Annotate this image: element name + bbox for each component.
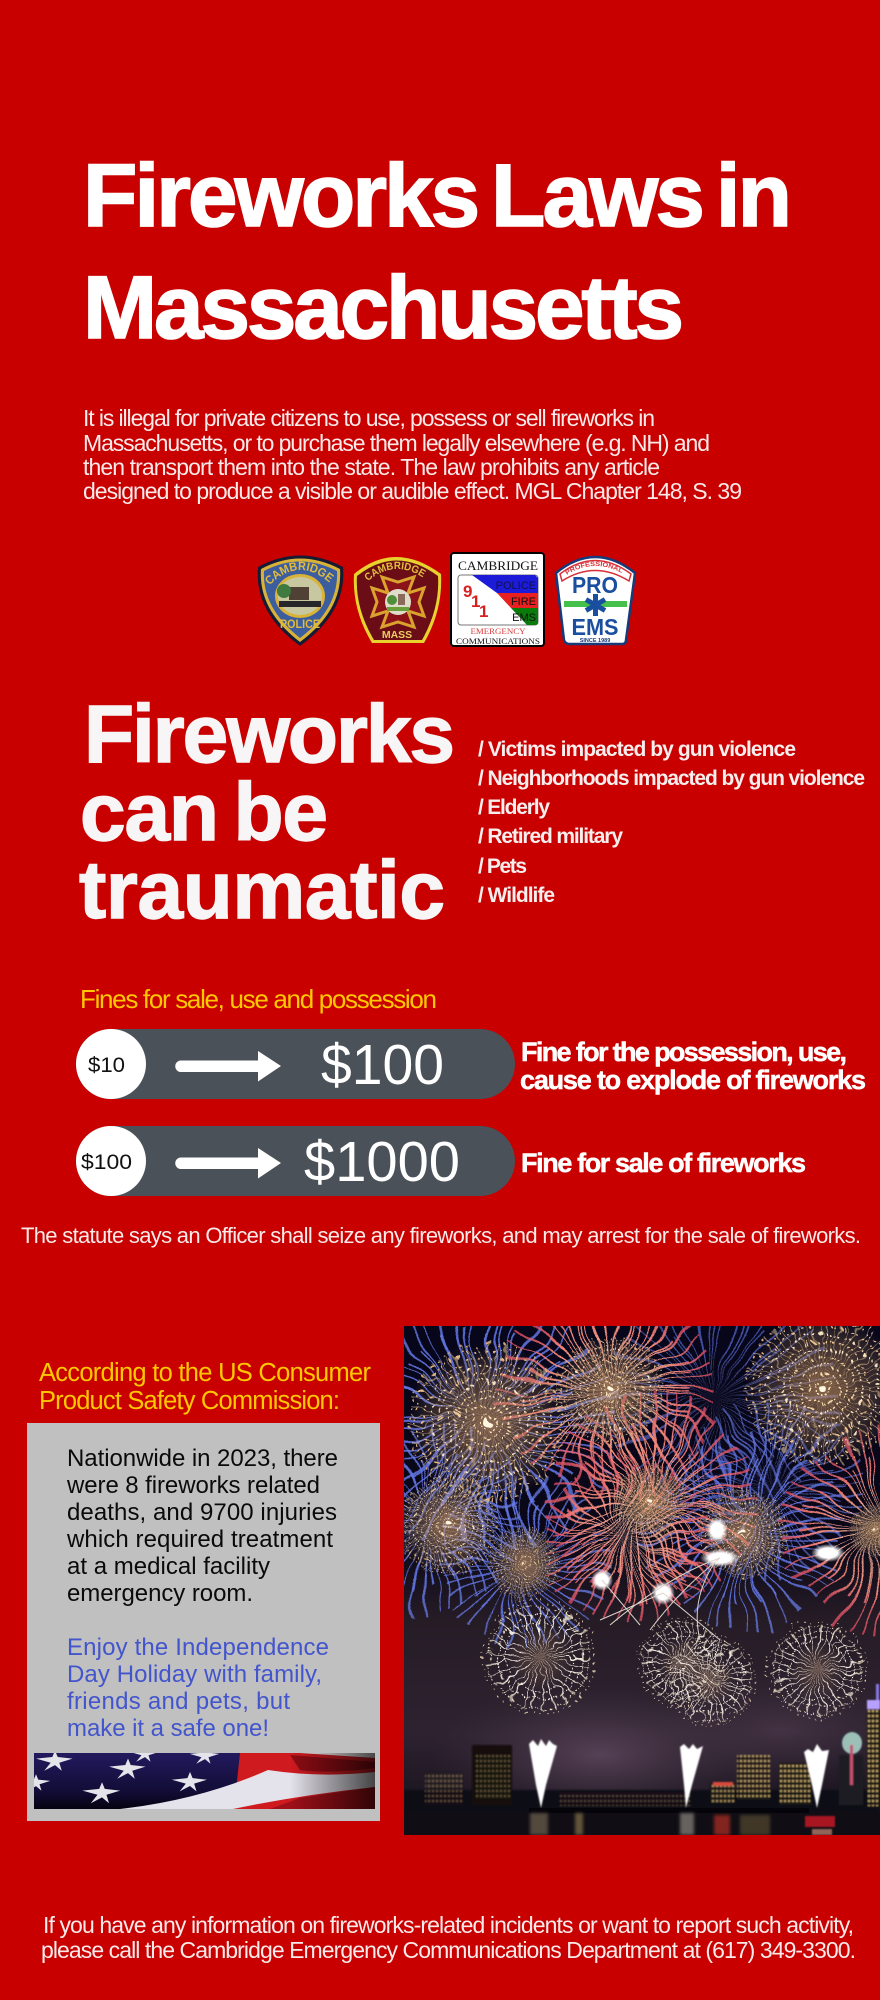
icon: Cambridge fire badge: MASS <box>382 629 412 641</box>
statistics text: at a medical facility <box>67 1553 270 1580</box>
icon: Cambridge 911 emergency communications logo: 1 <box>479 602 488 621</box>
fountains <box>529 1739 829 1808</box>
icon: Cambridge fire badge: CAMBRIDGE <box>364 562 426 580</box>
list: who is affected: / Wildlife <box>478 884 555 907</box>
logos row <box>258 552 636 647</box>
icon: Cambridge 911 emergency communications logo: EMS <box>512 612 536 624</box>
fine description: possession: cause to explode of fireworks <box>520 1065 866 1095</box>
footer contact note: please call the Cambridge Emergency Communications Department at (617) 349-3300. <box>41 1937 856 1963</box>
holiday message: make it a safe one! <box>67 1715 269 1742</box>
gold bursts <box>404 1326 880 1602</box>
fine pill: possession: $100 <box>321 1033 444 1097</box>
holiday message <box>67 1634 329 1742</box>
icon: Pro EMS badge: EMS <box>572 614 618 640</box>
holiday message: Day Holiday with family, <box>67 1661 322 1688</box>
statistics text: were 8 fireworks related <box>66 1472 320 1499</box>
holiday message: friends and pets, but <box>67 1688 290 1715</box>
heading: fireworks can be traumatic: can be <box>80 767 328 858</box>
title: Massachusetts <box>83 257 684 357</box>
icon: Cambridge 911 emergency communications logo: EMERGENCY <box>470 626 526 636</box>
icon: Cambridge 911 emergency communications logo <box>451 553 544 646</box>
statistics text: emergency room. <box>67 1580 253 1607</box>
intro paragraph: then transport them into the state. The law prohibits any article <box>83 454 660 480</box>
icon: Cambridge police badge <box>258 556 344 646</box>
icon: Cambridge 911 emergency communications logo: 1 <box>471 592 480 611</box>
icon: Cambridge fire badge <box>354 557 442 643</box>
holiday message: Enjoy the Independence <box>67 1634 329 1661</box>
icon: Pro EMS badge: SINCE 1989 <box>580 638 610 644</box>
footer contact note <box>41 1912 856 1963</box>
list: who is affected: / Elderly <box>478 796 550 819</box>
icon: Cambridge police badge: CAMBRIDGE <box>266 562 334 584</box>
image: American flag <box>34 1753 375 1809</box>
arrow <box>175 1051 281 1082</box>
icon: Cambridge 911 emergency communications logo: FIRE <box>511 596 536 608</box>
title <box>83 145 792 357</box>
CPSC heading <box>39 1359 372 1415</box>
CPSC heading: Product Safety Commission: <box>39 1387 340 1415</box>
fine pill: sale <box>76 1126 515 1196</box>
water and reflections <box>404 1808 880 1835</box>
heading: fireworks can be traumatic <box>79 689 455 936</box>
footer contact note: If you have any information on fireworks-related incidents or want to report such activity, <box>43 1912 854 1938</box>
statistics text: deaths, and 9700 injuries <box>67 1499 337 1526</box>
statute note: The statute says an Officer shall seize any fireworks, and may arrest for the sale of fireworks. <box>21 1223 861 1248</box>
heading: fireworks can be traumatic: traumatic <box>79 845 445 936</box>
arrow <box>175 1148 281 1178</box>
fine description: possession <box>520 1037 866 1095</box>
icon: Pro EMS badge: PRO <box>572 572 618 598</box>
fine pill: possession: $10 <box>88 1054 125 1077</box>
fine description: sale: Fine for sale of fireworks <box>521 1148 806 1178</box>
list: who is affected: / Pets <box>478 855 527 878</box>
fine pill: sale: $100 <box>81 1151 132 1174</box>
intro paragraph: It is illegal for private citizens to use, possess or sell fireworks in <box>83 405 655 431</box>
list: who is affected: / Retired military <box>478 825 623 848</box>
fines heading: Fines for sale, use and possession <box>80 984 437 1014</box>
image: fireworks over the city skyline <box>404 1326 880 1835</box>
white bursts <box>483 1600 869 1736</box>
icon: Cambridge police badge: POLICE <box>280 619 320 631</box>
statistics text: Nationwide in 2023, there <box>67 1445 338 1472</box>
list: who is affected <box>478 738 865 907</box>
list: who is affected: / Victims impacted by gun violence <box>478 738 796 761</box>
skyline <box>404 1684 880 1814</box>
fine description: possession: Fine for the possession, use, <box>521 1037 847 1067</box>
icon: Pro EMS badge: PROFESSIONAL <box>565 562 622 575</box>
fine pill: sale: $1000 <box>304 1130 460 1194</box>
list: who is affected: / Neighborhoods impacted by gun violence <box>478 767 865 790</box>
fine pill: possession <box>76 1029 515 1099</box>
icon: Cambridge 911 emergency communications logo: 9 <box>463 582 472 601</box>
intro paragraph: designed to produce a visible or audible effect. MGL Chapter 148, S. 39 <box>83 478 742 504</box>
icon: Cambridge 911 emergency communications logo: POLICE <box>496 580 536 592</box>
statistics text: which required treatment <box>66 1526 333 1553</box>
icon: Pro EMS badge <box>554 556 636 646</box>
smoke <box>484 1700 848 1790</box>
panel: safety statistics <box>21 1423 380 1821</box>
title: Fireworks Laws in <box>83 145 792 245</box>
blue and red bursts <box>382 1333 880 1612</box>
CPSC heading: According to the US Consumer <box>39 1359 372 1387</box>
heading: fireworks can be traumatic: Fireworks <box>84 689 455 780</box>
icon: Cambridge 911 emergency communications logo: CAMBRIDGE <box>458 558 538 573</box>
intro paragraph <box>83 405 742 504</box>
bright flares <box>591 1517 845 1640</box>
intro paragraph: Massachusetts, or to purchase them legally elsewhere (e.g. NH) and <box>83 430 710 456</box>
statistics text <box>66 1445 338 1607</box>
icon: Cambridge 911 emergency communications logo: COMMUNICATIONS <box>456 636 540 646</box>
